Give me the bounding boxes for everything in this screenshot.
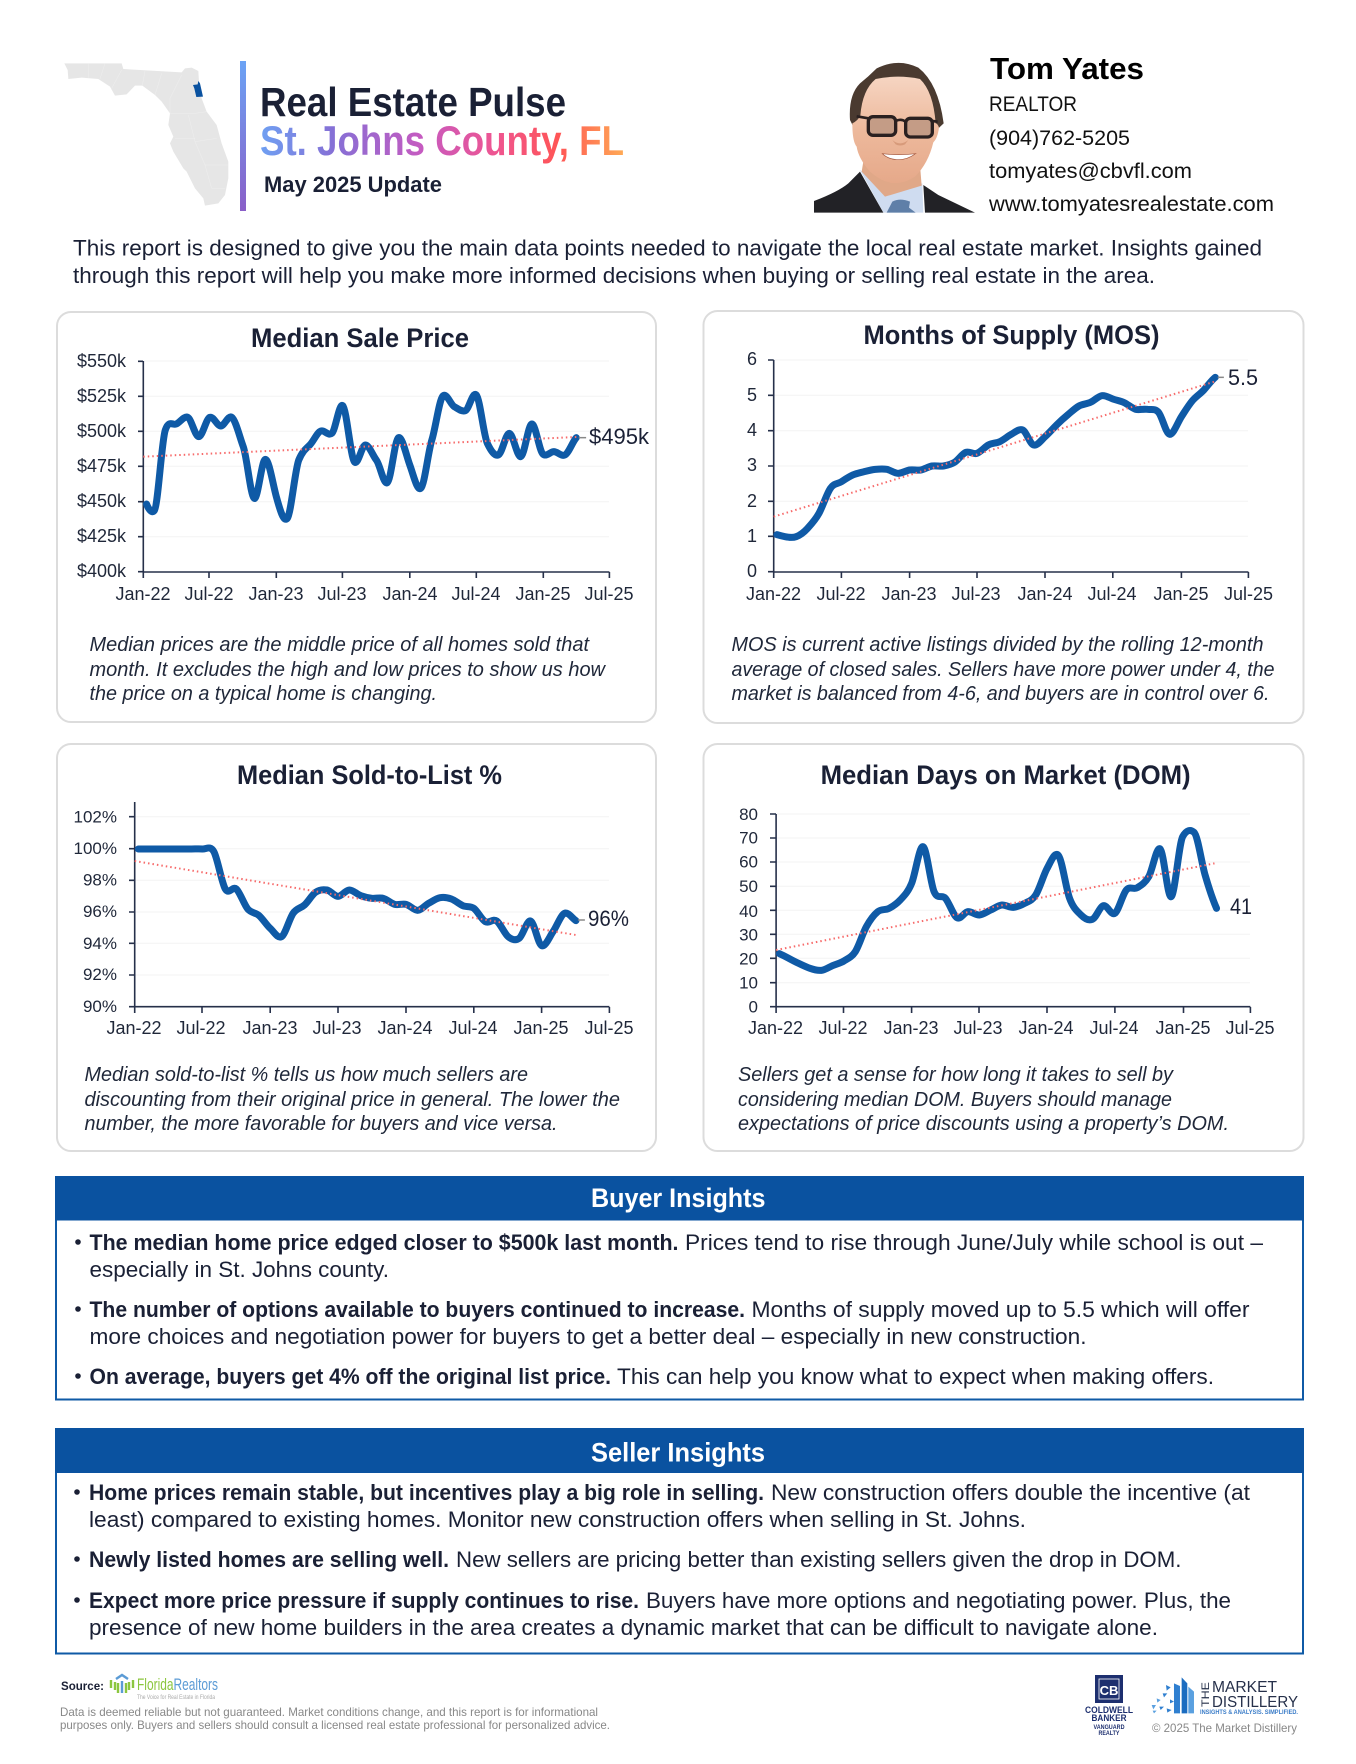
logo: Coldwell Banker: BANKER [1092, 1713, 1127, 1723]
line chart: sold-to-list: Jan-23 [242, 1018, 298, 1038]
line chart: median sale price [77, 351, 650, 604]
agent title: REALTOR [989, 92, 1077, 116]
bullet 3: This can help you know what to expect when making offers. [617, 1364, 1214, 1389]
line chart: sold-to-list: 100% [74, 839, 117, 858]
heading: Median Sale Price [251, 323, 469, 353]
bullet 2: Newly listed homes are selling well. [89, 1547, 449, 1572]
bullet 1: especially in St. Johns county. [90, 1257, 389, 1282]
copyright: © 2025 The Market Distillery [1152, 1721, 1297, 1735]
header band [55, 1176, 1304, 1220]
line chart: months of supply: 4 [747, 420, 757, 440]
bullet 3 [74, 1588, 1231, 1640]
bullet 1: least) compared to existing homes. Monitor new construction offers when selling in St. Johns. [89, 1507, 1026, 1532]
disclaimer: purposes only. Buyers and sellers should consult a licensed real estate professional for personalized advice. [60, 1718, 610, 1732]
line chart: months of supply: 5.5 [1228, 365, 1258, 390]
line chart: median sale price: Jan-23 [248, 584, 304, 604]
intro text [73, 236, 1262, 288]
caption [84, 1064, 620, 1135]
logo: Coldwell Banker: CB [1100, 1683, 1118, 1698]
line chart: sold-to-list: Jul-23 [312, 1018, 362, 1038]
source label: Source: [61, 1679, 104, 1693]
line chart: median sale price: $500k [77, 421, 127, 441]
line chart: days on market: Jan-23 [883, 1018, 939, 1038]
agent phone: (904)762-5205 [989, 126, 1130, 150]
line chart: months of supply [746, 349, 1273, 604]
caption: month. It excludes the high and low prices to show us how [90, 659, 607, 681]
header band [55, 1428, 1304, 1473]
logo: Coldwell Banker: REALTY [1098, 1730, 1120, 1737]
line chart: days on market: 60 [739, 852, 758, 872]
line chart: median sale price: Jan-25 [515, 584, 571, 604]
line chart: median sale price: $425k [77, 526, 127, 546]
line chart: sold-to-list: 96% [588, 906, 629, 931]
line chart: days on market: 50 [739, 877, 758, 896]
line chart: months of supply: Jan-25 [1153, 584, 1209, 604]
line chart: sold-to-list: Jul-22 [176, 1018, 226, 1038]
line chart: sold-to-list: 94% [83, 934, 117, 953]
caption: Median prices are the middle price of all homes sold that [90, 634, 590, 656]
line chart: months of supply: 0 [747, 561, 757, 581]
logo: Coldwell Banker [1085, 1675, 1133, 1737]
bullet 1: Prices tend to rise through June/July while school is out – [685, 1230, 1263, 1255]
panel: median days on market [704, 744, 1304, 1151]
bullet 3: Buyers have more options and negotiating power. Plus, the [646, 1588, 1231, 1613]
line chart: sold-to-list: 98% [83, 870, 117, 890]
line chart: months of supply: Jan-23 [881, 584, 937, 604]
line chart: months of supply: 6 [747, 349, 757, 369]
bullet 1: Home prices remain stable, but incentives play a big role in selling. [89, 1480, 764, 1505]
panel: months of supply [704, 311, 1304, 723]
bullet 3: Expect more price pressure if supply continues to rise. [89, 1588, 639, 1613]
line chart: sold-to-list: Jan-24 [377, 1018, 433, 1038]
caption: expectations of price discounts using a property’s DOM. [738, 1113, 1229, 1135]
line chart: median sale price: Jul-22 [184, 584, 234, 604]
agent website: www.tomyatesrealestate.com [988, 192, 1274, 216]
line chart: sold-to-list: Jan-22 [106, 1018, 162, 1038]
heading: Buyer Insights [591, 1183, 766, 1213]
bullet 1: New construction offers double the incentive (at [771, 1480, 1251, 1505]
bullet 3 [75, 1364, 1214, 1389]
line chart: median sale price: Jan-24 [382, 584, 438, 604]
line chart: sold-to-list: Jan-25 [513, 1018, 569, 1038]
line chart: sold-to-list: 90% [83, 997, 117, 1016]
logo: Coldwell Banker: COLDWELL [1085, 1705, 1133, 1715]
line chart: months of supply: Jan-22 [746, 584, 801, 604]
logo: Florida Realtors: FloridaRealtors [137, 1675, 218, 1694]
caption: number, the more favorable for buyers and vice versa. [84, 1113, 558, 1135]
line chart: sold-to-list: 96% [83, 902, 117, 921]
line chart: median sale price: Jul-25 [584, 584, 634, 604]
line chart: days on market: 20 [739, 950, 758, 968]
agent email: tomyates@cbvfl.com [989, 159, 1192, 183]
heading: Months of Supply (MOS) [864, 320, 1160, 350]
disclaimer [60, 1705, 610, 1732]
line chart: days on market: Jul-22 [818, 1018, 868, 1038]
line chart: median sale price: $475k [77, 456, 127, 476]
caption: discounting from their original price in general. The lower the [84, 1089, 620, 1111]
caption [90, 634, 607, 705]
line chart: months of supply: 5 [747, 385, 757, 405]
caption: market is balanced from 4-6, and buyers are in control over 6. [732, 683, 1270, 705]
heading: Median Days on Market (DOM) [821, 760, 1191, 790]
line chart: days on market: 10 [739, 974, 758, 992]
line chart: months of supply: 2 [747, 491, 757, 511]
line chart: median sale price: $525k [77, 386, 127, 406]
logo: Florida Realtors: The Voice for Real Estate in Florida [137, 1695, 216, 1701]
panel: seller insights [55, 1428, 1304, 1654]
bullet 1 [75, 1230, 1263, 1282]
caption [732, 634, 1274, 705]
line chart: days on market: Jan-24 [1018, 1018, 1074, 1038]
line chart: sold-to-list: Jul-24 [448, 1018, 498, 1038]
line chart: months of supply: Jul-22 [816, 584, 866, 604]
line chart: median sale price: $400k [77, 561, 127, 581]
disclaimer: Data is deemed reliable but not guaranteed. Market conditions change, and this report is for informational [60, 1705, 598, 1719]
line chart: days on market: Jul-24 [1089, 1018, 1139, 1038]
line chart: days on market: Jan-22 [748, 1018, 803, 1038]
caption: considering median DOM. Buyers should manage [738, 1089, 1172, 1111]
caption: MOS is current active listings divided by the rolling 12-month [732, 634, 1264, 656]
logo: Florida Realtors [111, 1675, 218, 1701]
bullet 3: On average, buyers get 4% off the original list price. [90, 1364, 611, 1389]
logo: The Market Distillery: DISTILLERY [1212, 1694, 1298, 1711]
line chart: days on market: 41 [1230, 894, 1252, 919]
bullet 2: New sellers are pricing better than existing sellers given the drop in DOM. [456, 1547, 1182, 1572]
subtitle: county: St. Johns County, FL [260, 117, 624, 164]
caption [738, 1064, 1229, 1135]
line chart: months of supply: 1 [747, 526, 757, 546]
line chart: median sale price: $495k [589, 424, 650, 449]
agent name: Tom Yates [990, 51, 1144, 86]
line chart: median sale price: $450k [77, 491, 127, 511]
line chart: median sale price: Jan-22 [115, 584, 171, 604]
panel: buyer insights [55, 1176, 1304, 1400]
bullet 2 [74, 1547, 1182, 1572]
bullet 2: Months of supply moved up to 5.5 which will offer [752, 1297, 1250, 1322]
line chart: days on market [739, 805, 1275, 1038]
line chart: months of supply: Jan-24 [1017, 584, 1073, 604]
bullet 1: The median home price edged closer to $500k last month. [90, 1230, 678, 1255]
line chart: sold-to-list: 102% [74, 808, 117, 826]
line chart: median sale price: Jul-23 [317, 584, 367, 604]
heading: Seller Insights [591, 1438, 765, 1468]
line chart: days on market: 0 [749, 998, 758, 1016]
logo: The Market Distillery: MARKET [1212, 1679, 1277, 1696]
icon: Florida map with St. Johns County highlighted [64, 63, 228, 206]
title: Real Estate Pulse [260, 79, 566, 125]
line chart: days on market: Jul-23 [953, 1018, 1003, 1038]
logo: Coldwell Banker: VANGUARD [1094, 1724, 1125, 1731]
bullet 2 [75, 1297, 1250, 1349]
intro text: through this report will help you make more informed decisions when buying or selling real estate in the area. [73, 263, 1155, 288]
line chart: days on market: 40 [739, 902, 758, 921]
gradient divider bar [240, 61, 246, 211]
line chart: days on market: 30 [739, 926, 758, 944]
line chart: median sale price: $550k [77, 351, 127, 371]
logo: The Market Distillery: INSIGHTS & ANALYSIS. SIMPLIFIED. [1200, 1709, 1298, 1716]
line chart: sold-to-list [74, 802, 634, 1038]
line chart: months of supply: Jul-25 [1224, 584, 1273, 604]
line chart: median sale price: Jul-24 [451, 584, 501, 604]
bullet 2: more choices and negotiation power for buyers to get a better deal – especially in new construction. [90, 1324, 1086, 1349]
logo: The Market Distillery [1152, 1677, 1298, 1716]
line chart: months of supply: Jul-23 [951, 584, 1001, 604]
line chart: days on market: Jul-25 [1225, 1018, 1275, 1038]
panel: median sold-to-list [57, 744, 656, 1151]
line chart: months of supply: 3 [747, 455, 757, 475]
bullet 2: The number of options available to buyers continued to increase. [90, 1297, 745, 1322]
line chart: days on market: 80 [739, 805, 758, 824]
date: May 2025 Update [264, 172, 442, 197]
line chart: months of supply: Jul-24 [1087, 584, 1137, 604]
icon: agent portrait [814, 63, 975, 213]
caption: Sellers get a sense for how long it takes to sell by [738, 1064, 1174, 1086]
intro text: This report is designed to give you the main data points needed to navigate the local real estate market. Insights gained [73, 236, 1262, 260]
bullet 3: presence of new home builders in the area creates a dynamic market that can be difficult to navigate alone. [89, 1615, 1158, 1640]
logo: The Market Distillery: THE [1200, 1682, 1212, 1707]
heading: Median Sold-to-List % [237, 760, 502, 790]
caption: average of closed sales. Sellers have more power under 4, the [732, 659, 1274, 681]
line chart: days on market: Jan-25 [1155, 1018, 1211, 1038]
bullet 1 [74, 1480, 1251, 1532]
caption: Median sold-to-list % tells us how much sellers are [84, 1064, 528, 1086]
caption: the price on a typical home is changing. [90, 683, 437, 705]
line chart: days on market: 70 [739, 828, 758, 848]
panel: median sale price [57, 312, 656, 722]
line chart: sold-to-list: 92% [83, 965, 117, 984]
line chart: sold-to-list: Jul-25 [584, 1018, 634, 1038]
